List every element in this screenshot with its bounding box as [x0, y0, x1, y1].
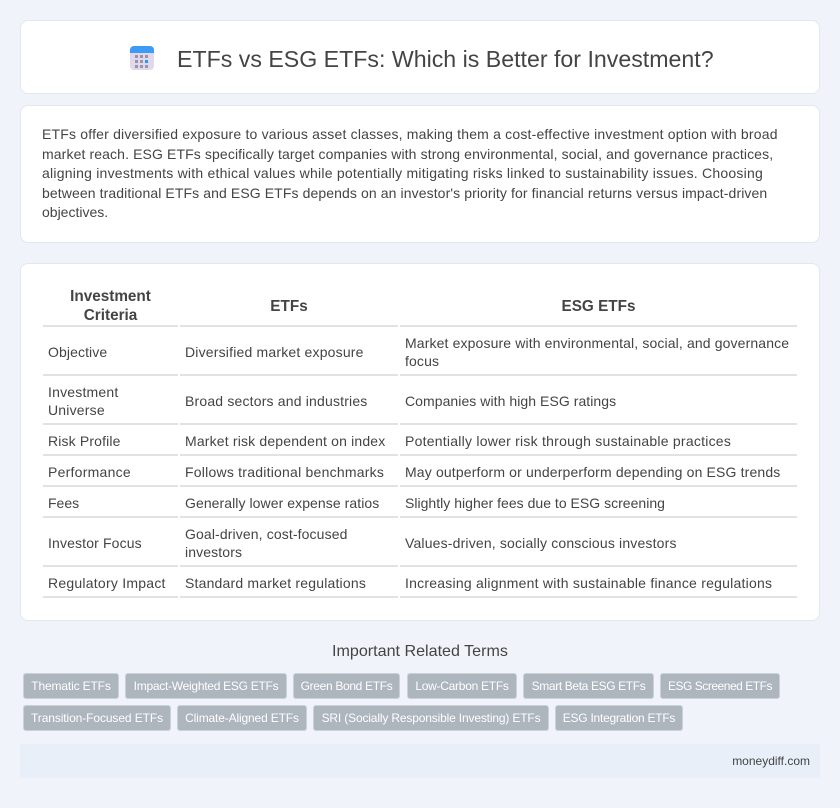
header card — [20, 20, 820, 94]
tag — [23, 705, 171, 731]
row: Performance: Follows traditional benchmarks — [185, 464, 384, 480]
tag: Smart Beta ESG ETFs — [532, 679, 645, 693]
table header: Investment Criteria: Investment — [70, 288, 151, 305]
row: Objective: Diversified market exposure — [185, 344, 364, 360]
tag — [313, 705, 549, 731]
tag — [293, 673, 400, 699]
row: Objective — [48, 335, 789, 369]
comparison table panel — [20, 263, 820, 621]
row: Performance: Performance — [48, 464, 131, 480]
tag — [407, 673, 517, 699]
tag — [523, 673, 654, 699]
description text: market reach. ESG ETFs specifically target companies with strong environmental, social, and governance practices, — [42, 146, 773, 162]
tag — [23, 673, 119, 699]
tag: SRI (Socially Responsible Investing) ETFs — [322, 711, 540, 725]
icon: calendar — [130, 46, 154, 70]
row: Fees: Slightly higher fees due to ESG screening — [405, 495, 665, 511]
tag: Climate-Aligned ETFs — [185, 711, 299, 725]
row: Investment Universe: Universe — [48, 402, 105, 418]
tag — [660, 673, 780, 699]
tag — [125, 673, 287, 699]
footer bar — [20, 744, 820, 778]
row: Risk Profile — [48, 433, 731, 449]
row: Risk Profile: Risk Profile — [48, 433, 121, 449]
related terms heading: Important Related Terms — [332, 642, 508, 660]
row: Investor Focus: Goal-driven, cost-focused — [185, 526, 348, 542]
row: Investment Universe — [48, 384, 616, 418]
row: Investment Universe: Companies with high ESG ratings — [405, 393, 616, 409]
row: Investor Focus: investors — [185, 544, 242, 560]
tag: Impact-Weighted ESG ETFs — [134, 679, 278, 693]
row: Objective: Market exposure with environmental, social, and governance — [405, 335, 789, 351]
row: Investor Focus — [48, 526, 677, 560]
row: Regulatory Impact: Standard market regulations — [185, 575, 366, 591]
tag: ESG Screened ETFs — [668, 679, 772, 693]
tag: Transition-Focused ETFs — [31, 711, 163, 725]
row: Fees: Fees — [48, 495, 79, 511]
tag: Low-Carbon ETFs — [415, 679, 509, 693]
row: Risk Profile: Market risk dependent on index — [185, 433, 385, 449]
row: Regulatory Impact — [48, 575, 772, 591]
footer source text: moneydiff.com — [732, 754, 810, 768]
table header: ESG ETFs: ESG ETFs — [562, 298, 635, 315]
row: Investment Universe: Investment — [48, 384, 118, 400]
row: Fees: Generally lower expense ratios — [185, 495, 379, 511]
description panel — [20, 105, 820, 243]
row: Objective: focus — [405, 353, 439, 369]
related terms tags — [23, 673, 780, 731]
row: Regulatory Impact: Increasing alignment with sustainable finance regulations — [405, 575, 772, 591]
row: Investment Universe: Broad sectors and industries — [185, 393, 367, 409]
row: Investor Focus: Investor Focus — [48, 535, 142, 551]
tag: Green Bond ETFs — [301, 679, 392, 693]
row: Fees — [48, 495, 665, 511]
row: Objective: Objective — [48, 344, 107, 360]
title: ETFs vs ESG ETFs: Which is Better for Investment? — [177, 46, 714, 72]
description text: between traditional ETFs and ESG ETFs depends on an investor's priority for financial returns versus impact-driven — [42, 185, 767, 201]
row: Regulatory Impact: Regulatory Impact — [48, 575, 166, 591]
tag: ESG Integration ETFs — [563, 711, 675, 725]
table header: Investment Criteria: Criteria — [84, 307, 137, 324]
table header: Investment Criteria — [70, 288, 151, 324]
description text: objectives. — [42, 204, 108, 220]
description text: aligning investments with ethical values while potentially mitigating risks linked to sustainability issues. Choosing — [42, 165, 763, 181]
row: Investor Focus: Values-driven, socially conscious investors — [405, 535, 677, 551]
row: Performance: May outperform or underperform depending on ESG trends — [405, 464, 780, 480]
description text: ETFs offer diversified exposure to various asset classes, making them a cost-effective investment option with broad — [42, 126, 778, 142]
row: Performance — [48, 464, 780, 480]
row: Risk Profile: Potentially lower risk through sustainable practices — [405, 433, 731, 449]
tag — [177, 705, 307, 731]
tag: Thematic ETFs — [31, 679, 111, 693]
description text — [42, 126, 778, 220]
tag — [555, 705, 683, 731]
table header: ETFs: ETFs — [270, 298, 308, 315]
